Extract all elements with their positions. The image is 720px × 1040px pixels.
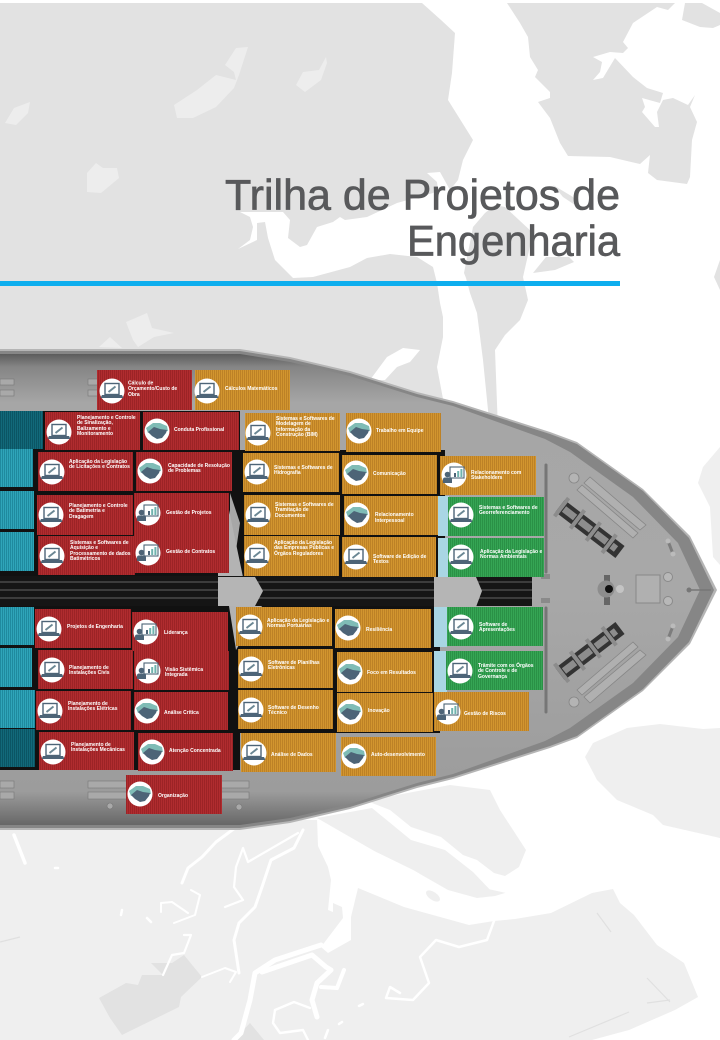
faint roads <box>0 913 670 1037</box>
container: Auto-desenvolvimento <box>341 737 436 776</box>
container: Instalações Elétricas <box>36 691 131 730</box>
container: Gestão de Riscos: Gestão de Riscos <box>464 711 506 717</box>
container: Instalações Mecânicas: Instalações Mecânicas <box>71 747 125 753</box>
container: Modelagem BIM <box>245 413 340 451</box>
container: Aquisição de dados batimétricos: Processamento de dados <box>70 551 131 557</box>
container: Empresas Públicas: das Empresas Públicas e <box>274 545 334 551</box>
container: Cálculo de Orçamento <box>97 370 192 410</box>
container: Comunicação: Comunicação <box>373 471 406 477</box>
rail <box>544 465 548 712</box>
land: lower mainland <box>0 820 698 1040</box>
container: Órgãos de Controle: Governança <box>478 674 507 680</box>
title rule <box>0 281 620 286</box>
container: Visão Sistêmica <box>134 651 229 690</box>
ship hull <box>0 349 717 830</box>
container: Georreferenciamento: Georreferenciamento <box>479 510 530 516</box>
title <box>225 172 620 266</box>
container: Edição de Textos <box>342 537 436 577</box>
container: Empresas Públicas <box>244 536 339 576</box>
container: Órgãos de Controle <box>446 651 543 690</box>
water details <box>370 60 473 380</box>
container: Batimetria e Dragagem <box>37 495 133 535</box>
container: Visão Sistêmica: Visão Sistêmica <box>165 667 203 673</box>
container: Atenção Concentrada <box>138 733 233 771</box>
container: Desenho Técnico: Software de Desenho <box>268 705 319 711</box>
creeks <box>14 825 494 1040</box>
container: Análise de Dados <box>241 733 336 772</box>
container: Normas Portuárias: Normas Portuárias <box>267 623 312 629</box>
container: Tramitação de Documentos <box>244 495 340 535</box>
container: Organização <box>126 775 222 814</box>
container: Auto-desenvolvimento: Auto-desenvolvimento <box>371 752 425 758</box>
container: Instalações Civis: Planejamento de <box>69 665 109 671</box>
container: Aquisição de dados batimétricos: Batimétricos <box>70 556 101 562</box>
container: Capacidade de Resolução: Capacidade de Resolução <box>168 463 230 469</box>
container: Tramitação de Documentos: Documentos <box>275 513 306 519</box>
container: Software de Apresentações: Software de <box>479 622 508 628</box>
container: Análise Crítica: Análise Crítica <box>164 710 199 716</box>
container: Georreferenciamento: Sistemas e Softwares de <box>479 505 538 511</box>
container: Empresas Públicas: Órgãos Reguladores <box>274 549 323 557</box>
container: Tramitação de Documentos: Sistemas e Softwares de <box>275 502 334 508</box>
container: Instalações Mecânicas <box>39 732 134 770</box>
container: Gestão de Projetos <box>134 493 229 533</box>
container: Instalações Civis: Instalações Civis <box>69 670 110 676</box>
container: Visão Sistêmica: Integrada <box>165 672 188 678</box>
container: Órgãos de Controle: Trâmite com os Órgãos <box>478 661 534 669</box>
container: Modelagem BIM: Informação da <box>276 427 310 433</box>
container: Gestão de Riscos <box>434 692 529 731</box>
container: Modelagem BIM: Modelagem de <box>276 421 311 427</box>
container: Cálculo de Orçamento: Cálculo de <box>128 380 154 386</box>
container: Relacionamento Stakeholders <box>440 456 536 495</box>
container: Software de Apresentações: Apresentações <box>479 627 515 633</box>
land: river island <box>464 205 533 430</box>
container: Hidrografia <box>243 453 339 492</box>
container: Planilhas Eletrônicas: Eletrônicas <box>268 665 295 671</box>
container: Planejamento e Controle de Sinalização: Balizamento e <box>77 426 111 432</box>
land: right lower blob <box>585 724 720 838</box>
land: river band <box>317 808 495 898</box>
bow fittings <box>541 465 711 712</box>
container: Relacionamento Stakeholders: Stakeholders <box>471 475 503 481</box>
container: Batimetria e Dragagem: de Batimetria e <box>69 508 105 514</box>
darker land patch <box>99 955 264 1040</box>
container: Planejamento e Controle de Sinalização: de Sinalização, <box>77 420 113 426</box>
container: Normas Ambientais <box>448 538 544 577</box>
container: Projetos de Engenharia <box>35 609 131 648</box>
land: top right islet <box>682 3 720 28</box>
river <box>317 818 515 953</box>
container: Aquisição de dados batimétricos: Aquisição e <box>70 545 98 551</box>
teal containers <box>0 411 43 767</box>
container: Órgãos de Controle: de Controle e de <box>478 668 517 674</box>
container: Gestão de Contratos: Gestão de Contratos <box>166 549 215 555</box>
container: Análise de Dados: Análise de Dados <box>271 752 313 758</box>
land: right edge <box>714 260 720 290</box>
container: Instalações Civis <box>38 650 133 689</box>
container: Modelagem BIM: Construção (BIM) <box>276 432 318 438</box>
container: Cálculo de Orçamento: Obra <box>128 392 140 398</box>
racks <box>577 477 646 538</box>
container: Inovação: Inovação <box>368 708 390 714</box>
container: Resiliência: Resiliência <box>366 627 392 633</box>
container: Hidrografia: Sistemas e Softwares de <box>274 465 333 471</box>
container: Gestão de Contratos <box>134 533 229 573</box>
container: Aquisição de dados batimétricos <box>38 536 135 575</box>
container: Relacionamento Stakeholders: Relacionamento com <box>471 470 522 476</box>
container: Capacidade de Resolução: de Problemas <box>168 468 201 474</box>
container: Georreferenciamento <box>448 497 544 536</box>
capstan <box>604 575 610 605</box>
container: Software de Apresentações <box>447 607 543 646</box>
container: Trabalho em Equipe <box>346 413 441 452</box>
container: Gestão de Projetos: Gestão de Projetos <box>166 510 212 516</box>
land: upper mainland <box>0 3 473 420</box>
container: Aplicação Licitações: Aplicação da Legislação <box>69 459 127 465</box>
container: Relacionamento Interpessoal: Relacionamento <box>375 512 414 518</box>
container: Liderança: Liderança <box>164 630 188 636</box>
hold backdrop <box>0 411 445 770</box>
container: Normas Ambientais: Normas Ambientais <box>480 554 527 560</box>
container: Aquisição de dados batimétricos: Sistemas e Softwares de <box>70 540 129 546</box>
container: Foco em Resultados <box>337 652 432 692</box>
container: Inovação <box>337 693 433 732</box>
container: Modelagem BIM: Sistemas e Softwares de <box>276 416 335 422</box>
container: Normas Portuárias: Aplicação da Legislação e <box>267 618 329 624</box>
container: Resiliência <box>335 609 431 648</box>
container: Foco em Resultados: Foco em Resultados <box>367 670 416 676</box>
container: Conduta Profissional: Conduta Profissional <box>174 427 225 433</box>
containers <box>35 370 544 814</box>
container: Cálculo de Orçamento: Orçamento/Custo de <box>128 386 177 392</box>
container: Tramitação de Documentos: Tramitação de <box>275 507 309 513</box>
container: Cálculos Matemáticos <box>194 370 290 410</box>
container: Cálculos Matemáticos: Cálculos Matemáticos <box>225 386 278 392</box>
container: Batimetria e Dragagem: Planejamento e Controle <box>69 503 128 509</box>
container: Normas Ambientais: Aplicação da Legislação e <box>480 549 542 555</box>
container: Desenho Técnico: Técnico <box>268 710 287 716</box>
light blue hatch panels <box>434 496 449 692</box>
land: upper right <box>507 3 697 184</box>
container: Edição de Textos: Textos <box>373 559 389 565</box>
container: Planilhas Eletrônicas: Software de Planilhas <box>268 660 320 666</box>
lakes: light patches <box>5 47 327 348</box>
land: upper estuary blob <box>370 785 526 876</box>
winches <box>560 506 620 674</box>
container: Trabalho em Equipe: Trabalho em Equipe <box>376 428 424 434</box>
central walkway <box>0 576 532 607</box>
container: Aplicação Licitações <box>38 452 133 491</box>
container: Batimetria e Dragagem: Dragagem <box>69 514 94 520</box>
deck wedges <box>218 510 262 650</box>
container: Planejamento e Controle de Sinalização: Planejamento e Controle <box>77 415 136 421</box>
container: Instalações Elétricas: Planejamento de <box>68 701 108 707</box>
container: Edição de Textos: Software de Edição de <box>373 554 427 560</box>
deck bars <box>0 379 249 810</box>
river islet <box>424 888 442 904</box>
container: Normas Portuárias <box>236 607 332 646</box>
land: right mid blob <box>698 447 720 565</box>
container: Projetos de Engenharia: Projetos de Engenharia <box>67 624 123 630</box>
container: Planejamento e Controle de Sinalização <box>45 412 140 450</box>
container: Instalações Mecânicas: Planejamento de <box>71 742 111 748</box>
container: Capacidade de Resolução <box>136 452 232 491</box>
container: Comunicação <box>342 455 437 494</box>
container: Organização: Organização <box>158 793 188 799</box>
bollards <box>668 541 673 639</box>
container: Liderança <box>132 612 228 651</box>
container: Planejamento e Controle de Sinalização: Monitoramento <box>77 431 113 437</box>
container: Aplicação Licitações: de Licitações e Contratos <box>69 464 130 470</box>
land: sliver islet <box>553 185 575 205</box>
container: Relacionamento Interpessoal: Interpessoal <box>375 518 405 524</box>
container: Relacionamento Interpessoal <box>344 496 438 535</box>
container: Conduta Profissional <box>143 412 239 450</box>
container: Planilhas Eletrônicas <box>238 649 333 688</box>
container: Desenho Técnico <box>238 690 333 729</box>
container: Empresas Públicas: Aplicação da Legislação <box>274 540 332 546</box>
container: Análise Crítica <box>134 692 228 730</box>
land: small islet <box>533 257 574 273</box>
container: Hidrografia: Hidrografia <box>274 470 301 476</box>
container: Atenção Concentrada: Atenção Concentrada <box>169 748 221 754</box>
title: Trilha de Projetos de <box>225 172 620 220</box>
container: Instalações Elétricas: Instalações Elétricas <box>68 706 118 712</box>
title: Engenharia <box>407 218 620 266</box>
